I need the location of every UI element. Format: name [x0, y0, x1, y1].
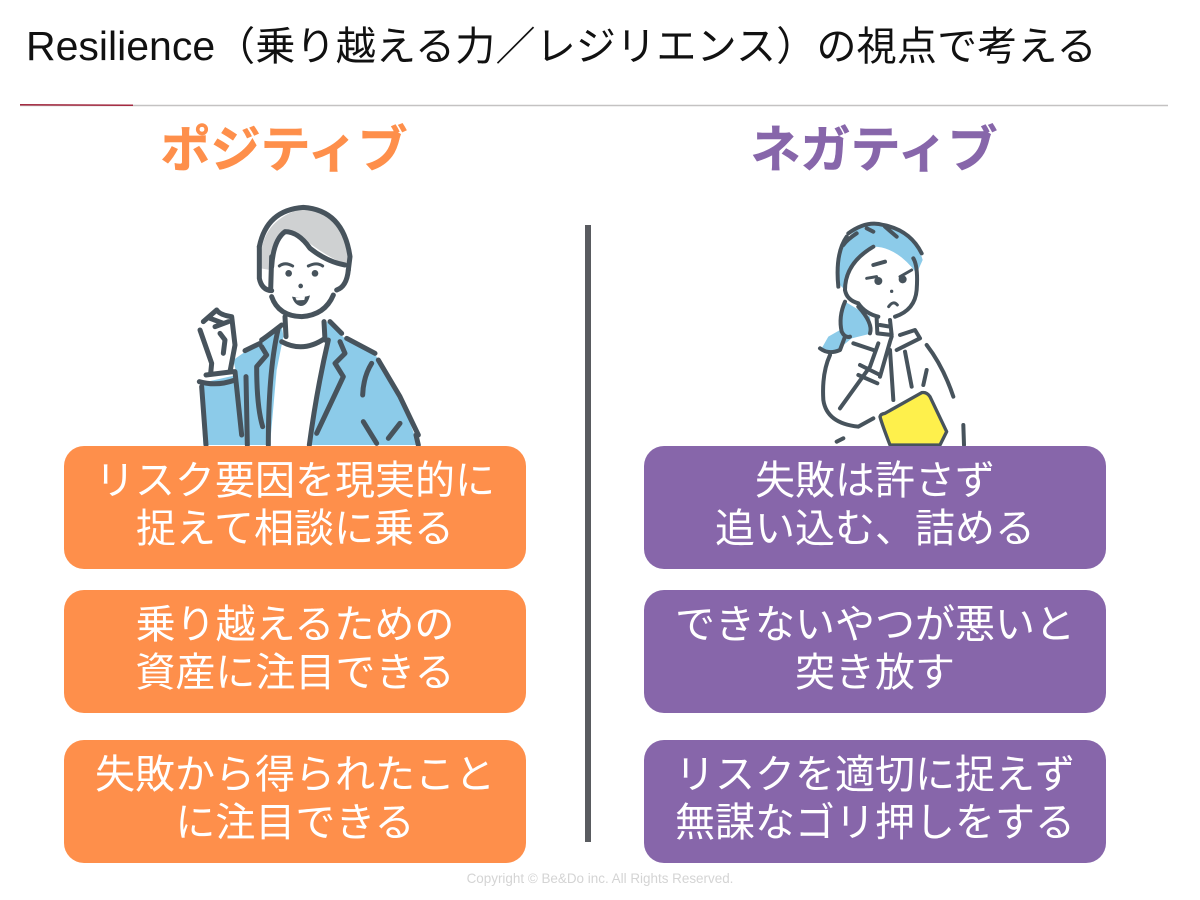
panel: positive 2: 資産に注目できる — [135, 651, 455, 695]
heading: positive: ポジティブ — [160, 122, 408, 178]
panel: negative 3: 無謀なゴリ押しをする — [675, 801, 1075, 845]
panel: negative 1: 追い込む、詰める — [715, 507, 1035, 551]
panel: negative 2 — [644, 590, 1106, 713]
heading: negative: ネガティブ — [750, 122, 998, 178]
title: Resilience（乗り越える力／レジリエンス）の視点で考える — [26, 23, 1097, 69]
panel: positive 2 — [64, 590, 526, 713]
panel: negative 1 — [644, 446, 1106, 569]
center divider — [585, 225, 591, 842]
panel: positive 1: 捉えて相談に乗る — [136, 507, 454, 551]
panel: positive 3: に注目できる — [175, 801, 415, 845]
panel: positive 1 — [64, 446, 526, 569]
panel: positive 1: リスク要因を現実的に — [95, 459, 495, 503]
panel: positive 3 — [64, 740, 526, 863]
panel: positive 2: 乗り越えるための — [136, 603, 454, 647]
panel: negative 1: 失敗は許さず — [755, 459, 995, 503]
title rule — [20, 104, 1168, 106]
panel: negative 2: 突き放す — [795, 651, 955, 695]
panel: positive 3: 失敗から得られたこと — [95, 753, 495, 797]
copyright: Copyright © Be&Do inc. All Rights Reserved. — [467, 871, 733, 886]
panel: negative 2: できないやつが悪いと — [675, 603, 1075, 647]
panel: negative 3 — [644, 740, 1106, 863]
panel: negative 3: リスクを適切に捉えず — [675, 753, 1075, 797]
